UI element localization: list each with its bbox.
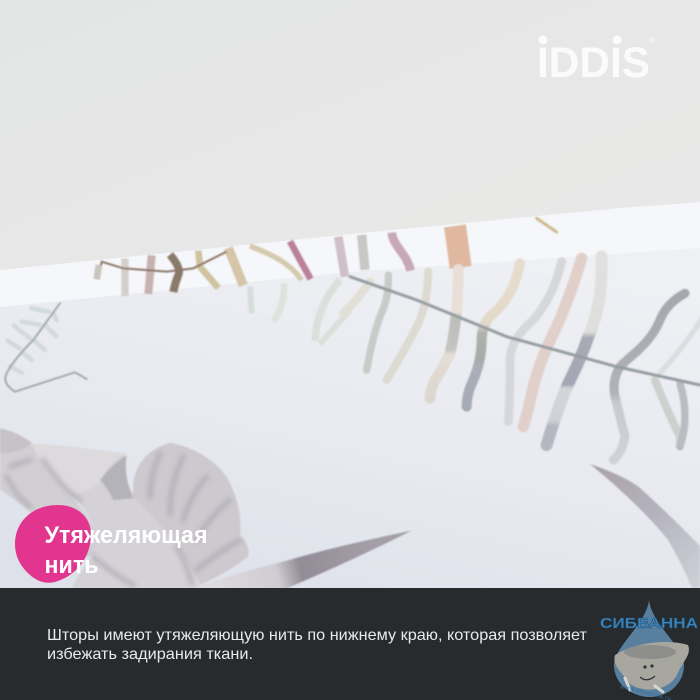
fabric background xyxy=(0,240,700,590)
leaf tip lower right xyxy=(590,464,700,588)
upper grey background panel xyxy=(0,0,700,270)
large fern frond right xyxy=(343,218,700,460)
curtain hem band xyxy=(0,202,700,307)
description text xyxy=(47,627,588,663)
brand logo: IDDIS xyxy=(537,39,650,87)
small fern sprig left xyxy=(5,303,87,392)
brand logo: ® xyxy=(649,36,655,45)
dark footer band xyxy=(0,588,700,700)
petal shading xyxy=(7,453,240,585)
heading: нить xyxy=(44,552,98,579)
flower print xyxy=(0,428,412,588)
heading: Утяжеляющая xyxy=(44,522,208,549)
pink circle badge xyxy=(15,505,91,583)
watermark logo: water drop with bathtub: СИБВАННА xyxy=(600,615,698,632)
fern print on hem xyxy=(97,237,350,344)
heading xyxy=(44,522,208,579)
description text: Шторы имеют утяжеляющую нить по нижнему краю, которая позволяет xyxy=(47,627,588,644)
watermark logo: water drop with bathtub xyxy=(600,600,698,700)
description text: избежать задирания ткани. xyxy=(47,646,253,663)
